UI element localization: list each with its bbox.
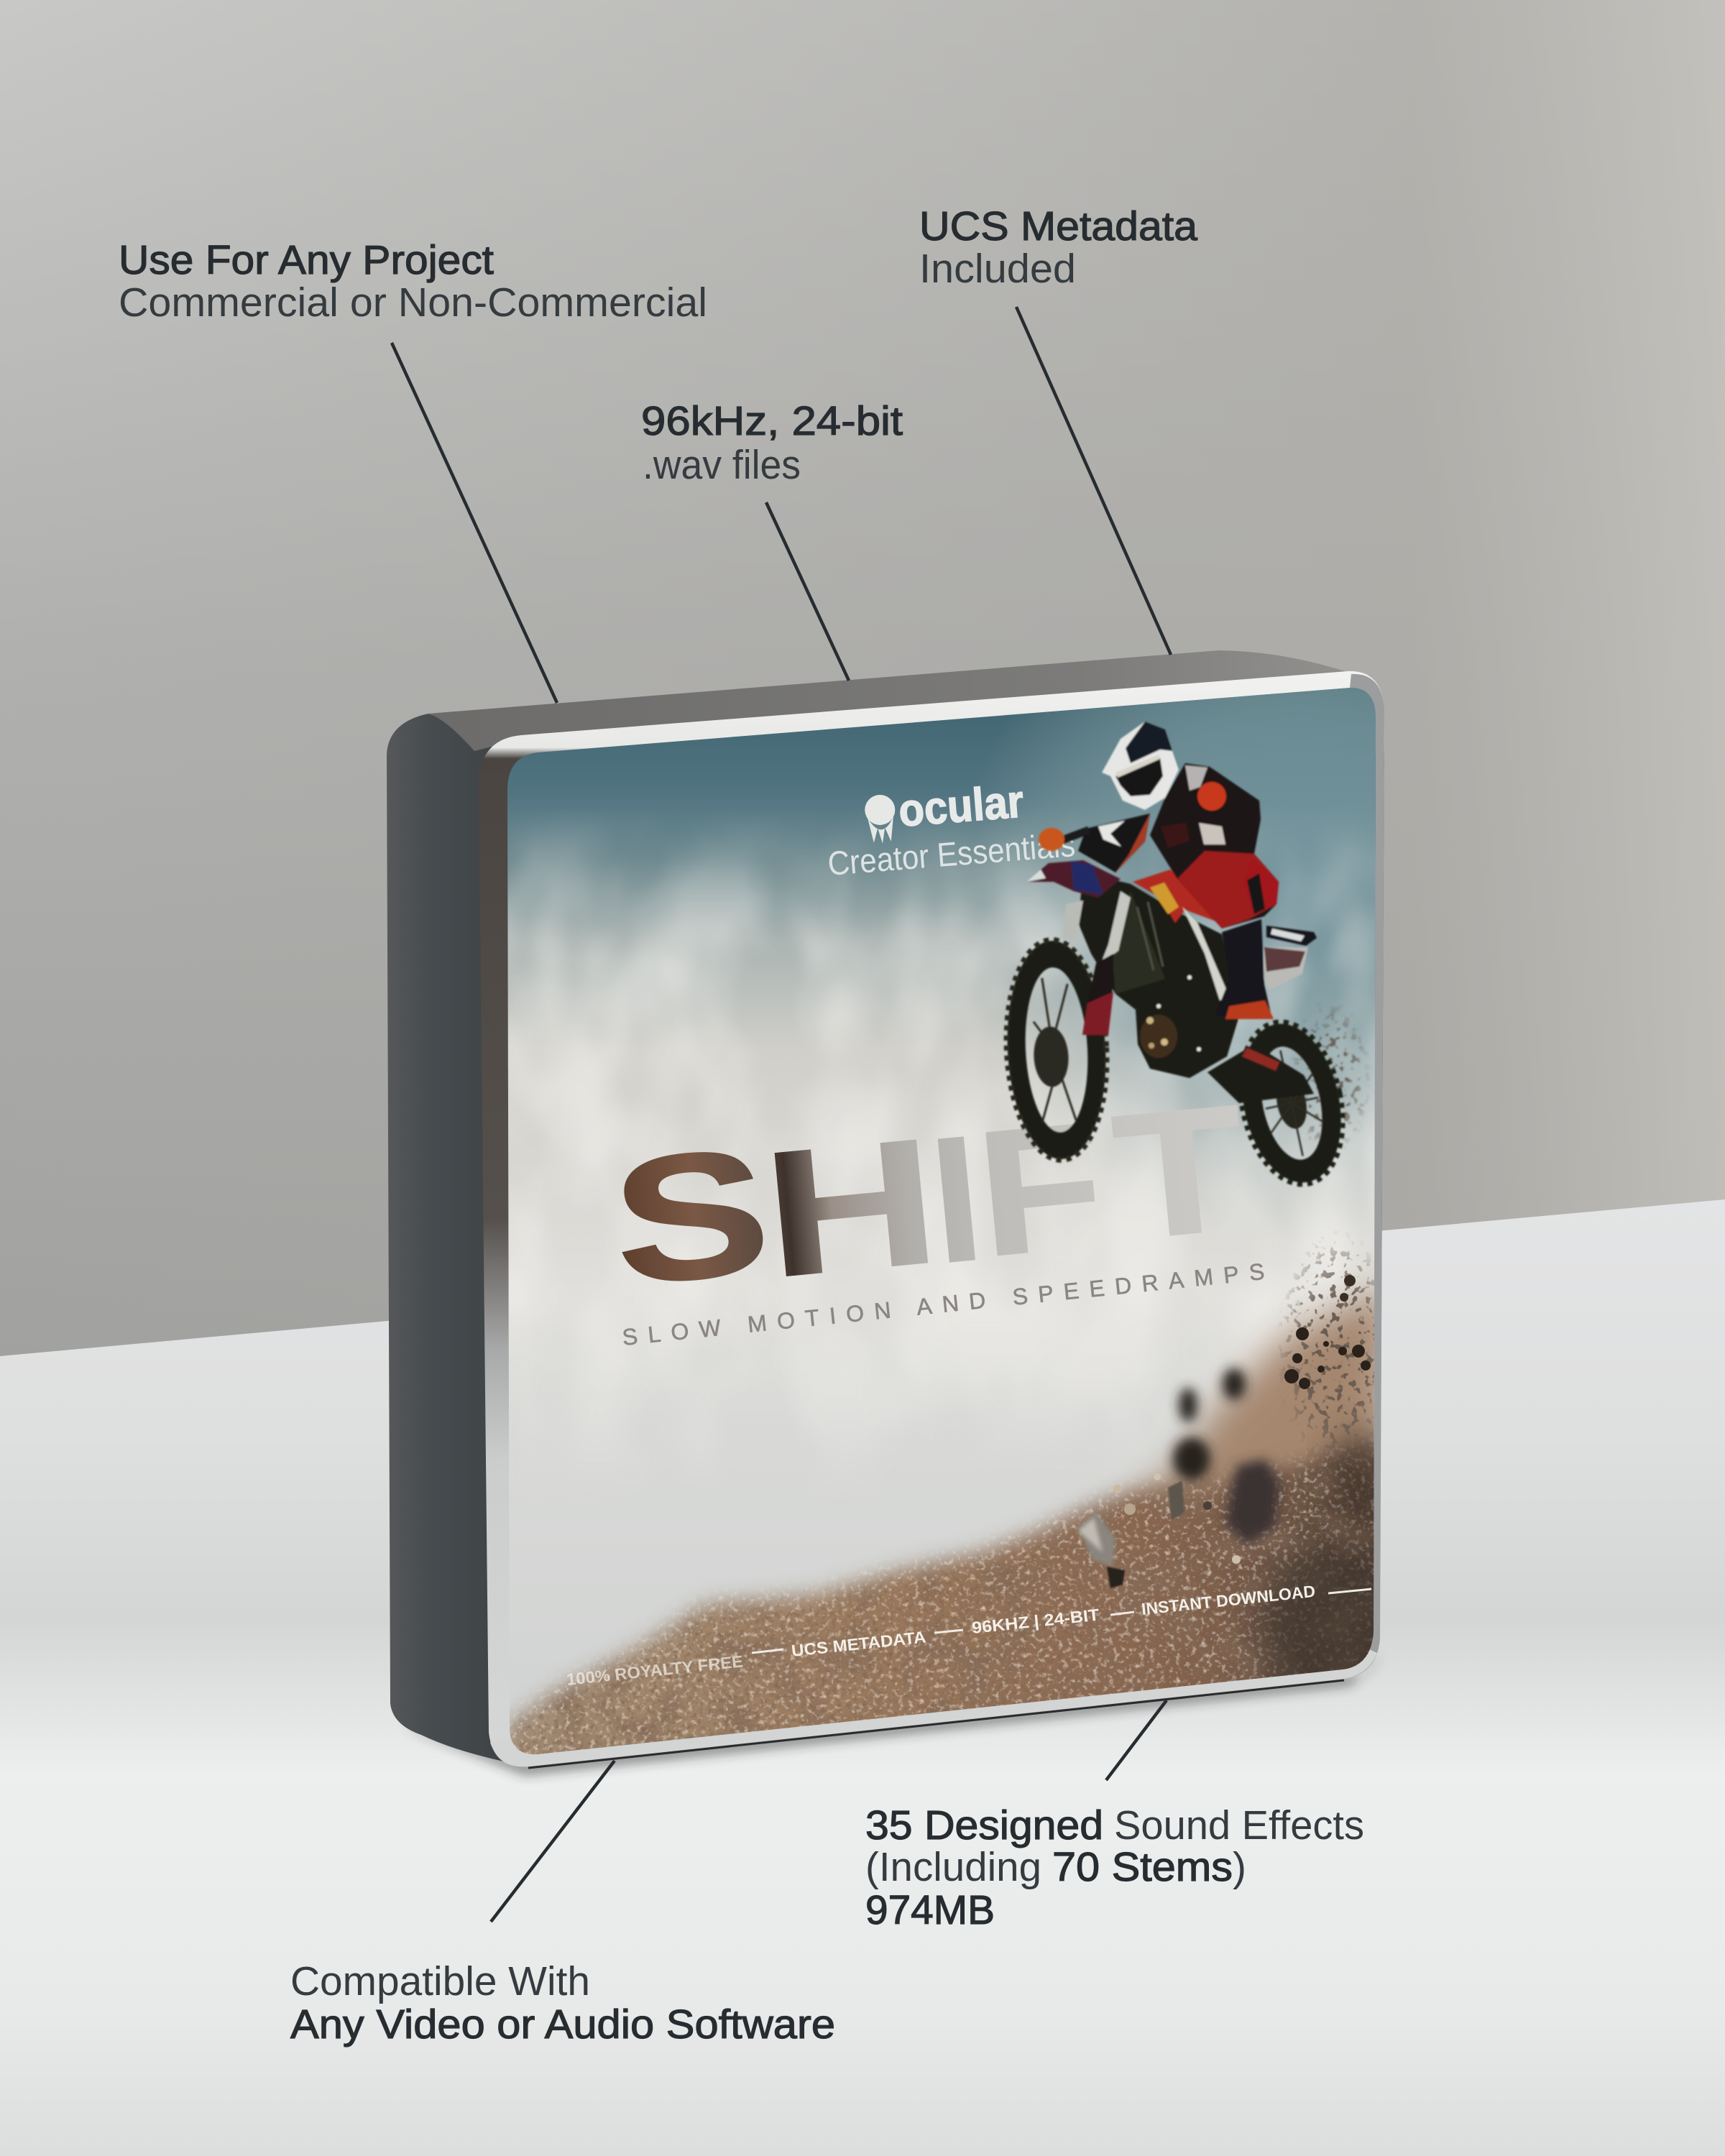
dirt specks bbox=[1279, 1233, 1374, 1453]
callout text: (Including bbox=[865, 1844, 1041, 1890]
callout text: 35 Designed bbox=[865, 1802, 1103, 1848]
bottom feature strip: 100% ROYALTY FREE bbox=[566, 1651, 744, 1689]
swingarm bbox=[1208, 1044, 1314, 1103]
radiator and frame mass bbox=[1078, 872, 1239, 1078]
boot bbox=[1225, 1000, 1274, 1019]
SHIFT title: F bbox=[970, 1084, 1111, 1294]
rear wheel bbox=[1227, 1013, 1356, 1194]
front fender bbox=[1026, 860, 1121, 898]
callout: use for any project bbox=[119, 237, 707, 703]
bottom feature strip bbox=[566, 1582, 1371, 1689]
SHIFT title: T bbox=[1106, 1067, 1254, 1278]
icon: octopus bbox=[865, 795, 896, 844]
callout: ucs metadata bbox=[919, 203, 1197, 655]
bike shroud bbox=[1133, 870, 1220, 923]
floor surface bbox=[0, 1199, 1725, 2156]
bottom feature strip: UCS METADATA bbox=[791, 1627, 926, 1660]
glove bbox=[1039, 828, 1064, 851]
callout: audio format bbox=[641, 398, 903, 681]
engine details bbox=[1140, 975, 1201, 1058]
exhaust and rear panel bbox=[1264, 947, 1308, 990]
bottom feature strip: 96KHZ | 24-BIT bbox=[971, 1606, 1100, 1637]
SHIFT title bbox=[604, 1067, 1254, 1323]
callout text: Use For Any Project bbox=[119, 237, 494, 283]
background wall bbox=[0, 0, 1725, 1365]
callout text: UCS Metadata bbox=[919, 203, 1197, 249]
white frame tube bbox=[1182, 907, 1230, 1000]
SHIFT title: H bbox=[756, 1100, 947, 1315]
callout text: Commercial or Non-Commercial bbox=[119, 280, 707, 326]
bottom feature strip: INSTANT DOWNLOAD bbox=[1141, 1582, 1316, 1618]
creator essentials line: Creator Essentials bbox=[827, 825, 1077, 883]
arrow line bbox=[766, 502, 849, 681]
rear wheel dirt spray bbox=[1288, 999, 1371, 1157]
callout text bbox=[865, 1802, 1364, 1933]
bottom edge line bbox=[528, 1680, 1344, 1768]
right edge of frame bbox=[1343, 674, 1384, 1679]
callout text bbox=[290, 1958, 835, 2047]
brand logo bbox=[865, 786, 1024, 844]
arrow line bbox=[392, 343, 557, 703]
callout text: Included bbox=[919, 246, 1076, 292]
flying rocks bbox=[1078, 1368, 1279, 1588]
SHIFT title: I bbox=[924, 1097, 990, 1301]
sky and dust cloud backdrop bbox=[507, 688, 1376, 1534]
callout: sound effects count bbox=[865, 1700, 1364, 1933]
ocular wordmark: ocular bbox=[897, 775, 1026, 837]
callout text: Any Video or Audio Software bbox=[290, 2001, 835, 2047]
callout text: 96kHz, 24-bit bbox=[641, 398, 903, 444]
callout text bbox=[919, 203, 1197, 292]
cover artwork bbox=[507, 688, 1376, 1755]
callout text bbox=[119, 237, 707, 326]
chest logo bbox=[1197, 782, 1226, 811]
callout text: 70 Stems bbox=[1052, 1844, 1233, 1890]
callout text bbox=[641, 398, 903, 488]
product box bbox=[387, 650, 1384, 1769]
rider arm bbox=[1078, 814, 1150, 872]
handlebar bbox=[1060, 830, 1089, 841]
box top side bbox=[428, 650, 1358, 751]
helmet bbox=[1102, 722, 1179, 810]
callout text: ) bbox=[1233, 1844, 1246, 1890]
SHIFT title: S bbox=[604, 1110, 778, 1323]
bottom band of frame bbox=[490, 1649, 1377, 1766]
callout text: Sound Effects bbox=[1114, 1802, 1364, 1848]
arrow line bbox=[1016, 307, 1171, 655]
rider torso bbox=[1150, 763, 1279, 929]
arrow line bbox=[491, 1761, 615, 1922]
lower fork guard bbox=[1082, 954, 1113, 1035]
motorbike and rider bbox=[1001, 722, 1371, 1194]
metal front frame bbox=[479, 671, 1384, 1766]
arrow line bbox=[1106, 1700, 1167, 1780]
rear fender bbox=[1266, 926, 1317, 946]
silver fork tubes bbox=[1062, 900, 1083, 941]
callout text: Compatible With bbox=[290, 1958, 590, 2004]
dirt ground bbox=[503, 1286, 1416, 1768]
callout text: 974MB bbox=[865, 1887, 995, 1933]
rider leg bbox=[1215, 919, 1271, 1016]
box left side bbox=[387, 714, 528, 1766]
shoulder stripe bbox=[1185, 765, 1208, 791]
callout text: .wav files bbox=[643, 442, 801, 488]
subtitle: SLOW MOTION AND SPEEDRAMPS bbox=[621, 1258, 1266, 1350]
callout: compatibility bbox=[290, 1761, 835, 2047]
box contact shadow bbox=[402, 1653, 1384, 1775]
front wheel bbox=[1001, 938, 1112, 1162]
